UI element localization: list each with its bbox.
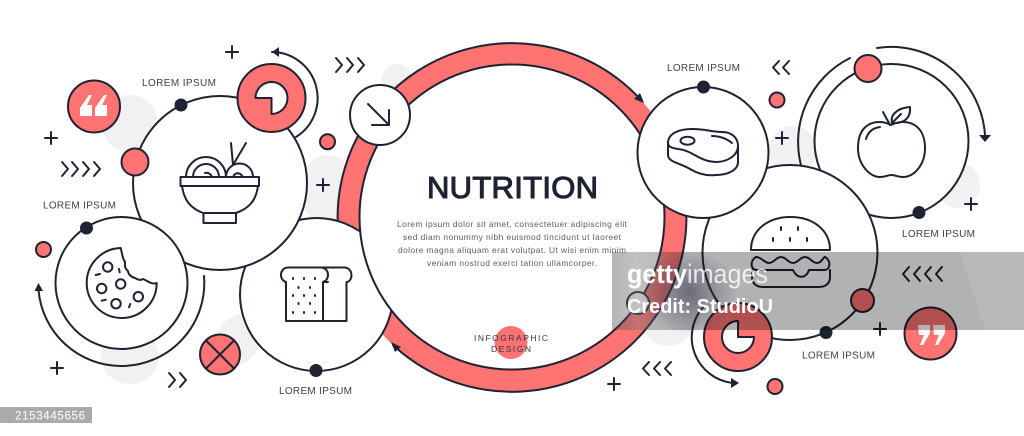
node: cookie dark dot [80, 222, 93, 234]
arrowhead: bottom ring [391, 342, 401, 352]
quote badge left [68, 80, 120, 132]
arc around left pie [272, 52, 318, 137]
arrowhead: top ring [634, 93, 644, 103]
panel: apple [798, 47, 991, 218]
panel: meat [638, 87, 768, 218]
sub-title: DESIGN [491, 344, 531, 354]
quote badge right [904, 308, 956, 360]
icon: pie left [256, 82, 288, 114]
pie node right [704, 303, 772, 371]
panel: burger [702, 165, 878, 340]
label: cookie: LOREM IPSUM [43, 200, 116, 212]
pie node left [238, 64, 306, 132]
coral dot behind sub-title [494, 326, 528, 359]
node: meat dark dot [697, 80, 710, 94]
icon: steak [668, 129, 738, 175]
watermark: gettyimages: gettyimages [627, 259, 768, 289]
arc around right pie [692, 306, 733, 383]
icon: diagonal arrow [368, 104, 389, 125]
cross badge [200, 334, 240, 374]
label: bread: LOREM IPSUM [279, 386, 352, 397]
arrowhead: right pie arc [731, 378, 739, 388]
label: apple: LOREM IPSUM [902, 229, 975, 240]
body text: Lorem ipsum dolor sit amet, consectetuer adipiscing elit [397, 219, 628, 229]
cookie outer arc with arrow [34, 276, 204, 366]
arrowhead: left pie arc [272, 47, 279, 57]
watermark: credit: Credit: StudioU [627, 296, 773, 318]
arrow circle [350, 85, 410, 145]
panel: bowl [133, 96, 307, 270]
plus marks [45, 46, 977, 390]
node: bowl coral [122, 148, 148, 176]
title: NUTRITION [427, 170, 598, 205]
node: burger coral [851, 289, 874, 312]
icon: noodle bowl [180, 143, 259, 223]
node: bowl dark dot [174, 98, 188, 112]
label: meat: LOREM IPSUM [667, 63, 740, 74]
sub-title [474, 333, 548, 354]
watermark band [612, 250, 1024, 334]
icon: closing quotes [918, 325, 945, 345]
icon: cookie [87, 248, 157, 318]
chevrons [62, 58, 942, 387]
body text: sed diam nonummy nibh euismod tincidunt ut laoreet [403, 232, 622, 242]
icon: apple [858, 107, 925, 177]
icon: opening quotes [80, 95, 107, 116]
panel: bread [240, 218, 393, 371]
body text: veniam nostrud exerci tation ullamcorper. [427, 258, 597, 268]
body text: dolore magna aliquam erat volutpat. Ut wisi enim minim [398, 245, 626, 255]
label: burger: LOREM IPSUM [802, 350, 875, 362]
sub-title: INFOGRAPHIC [474, 333, 548, 343]
body text [397, 219, 628, 268]
label: bowl: LOREM IPSUM [142, 78, 216, 89]
node: bread dark dot [310, 364, 322, 377]
main coral ring [338, 43, 686, 392]
icon: burger [751, 217, 830, 287]
node: apple dark dot [912, 206, 926, 219]
icon: pie right [722, 321, 754, 353]
background blobs [101, 64, 980, 384]
image id label: 2153445656 [15, 410, 85, 422]
node: burger dark dot [820, 326, 832, 339]
panel: cookie [56, 217, 188, 349]
node: apple coral [854, 55, 882, 82]
image id label [0, 407, 92, 423]
apple orbit arcs [798, 47, 991, 172]
central circle [360, 64, 664, 370]
small coral dots [36, 92, 784, 394]
icon: bread [281, 268, 351, 321]
